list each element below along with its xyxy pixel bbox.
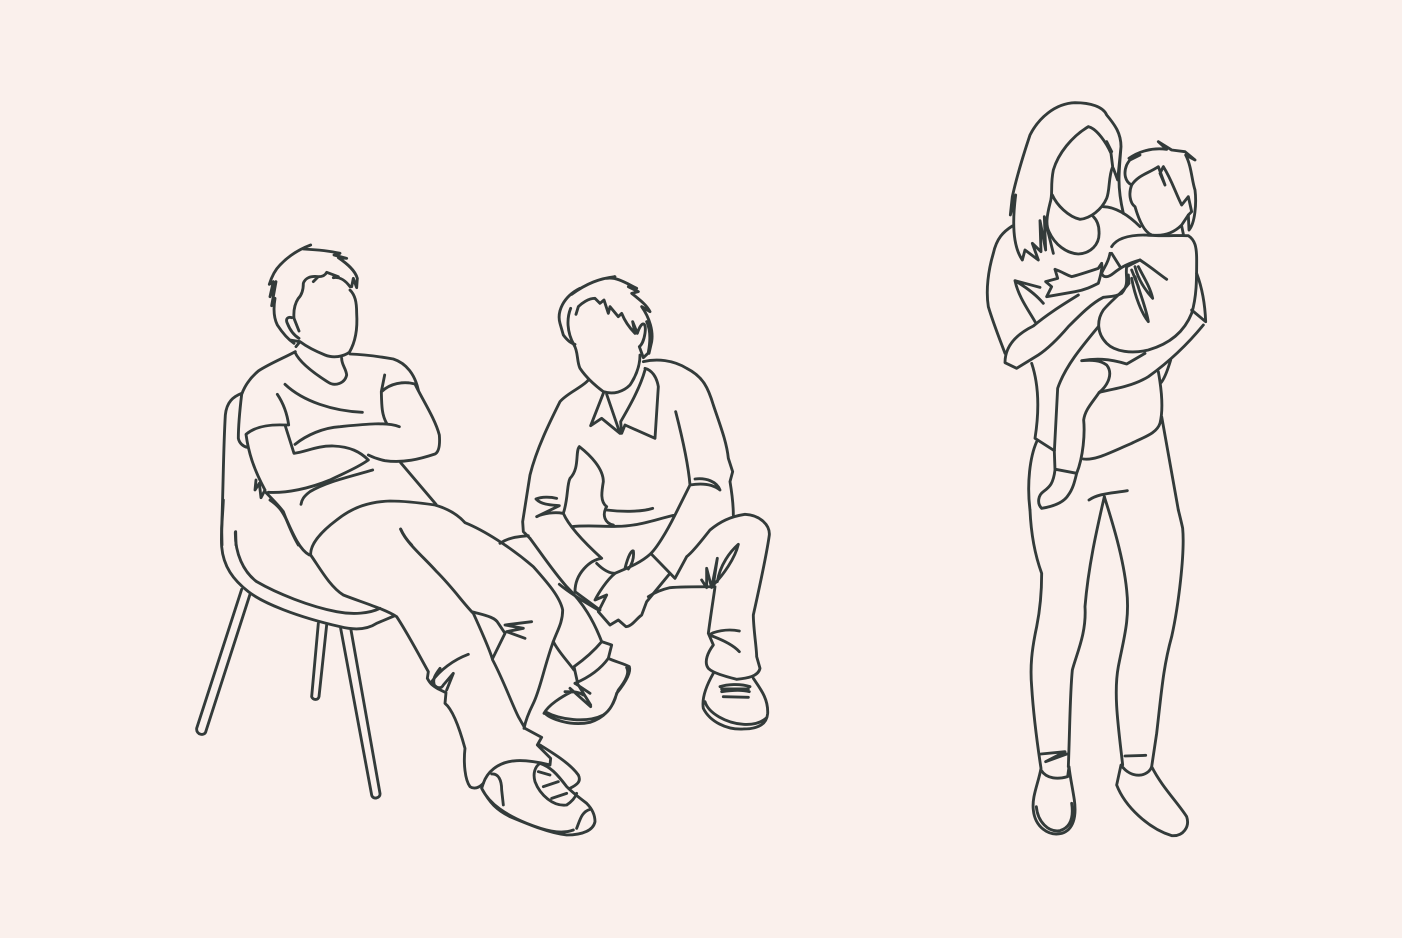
man one shoe [482,745,595,835]
child face [1130,185,1188,235]
man one shirt [238,352,436,545]
chair back top [222,393,242,545]
child leg and foot [1039,327,1099,508]
man two right shoe [703,673,768,729]
man one crossed arms [246,375,440,498]
chair seat [221,500,394,629]
mother hair [1010,103,1123,260]
mother right leg and shoe [1089,491,1188,836]
man two face [568,308,640,393]
man two torso and sleeves [523,360,733,627]
figure: mother legs and shoes [1030,491,1188,836]
chair legs [197,589,380,798]
man one face and ear [287,290,357,357]
man one hair [269,245,357,343]
figure: man with crossed arms, upper body [222,245,440,545]
man two right leg [648,514,769,679]
child hand [1046,263,1102,297]
man two left leg [500,536,612,683]
man two collar [591,368,658,438]
man one thigh top [401,529,412,545]
mother right arm [1082,273,1206,393]
figure: crouching man with collared shirt [500,277,769,729]
man two left shoe [544,658,630,724]
mother face and neck [1047,127,1113,254]
man one crossed legs [270,500,563,788]
mother left leg and shoe [1030,497,1104,834]
child body [1099,235,1197,352]
figure: chair and man one legs [197,500,595,835]
figure: mother holding child, upper body [987,103,1206,510]
child hair [1125,142,1196,230]
mother torso [1029,360,1178,510]
mother left arm [1005,253,1140,368]
mother shoulders [987,207,1140,353]
man two hair [559,277,652,358]
